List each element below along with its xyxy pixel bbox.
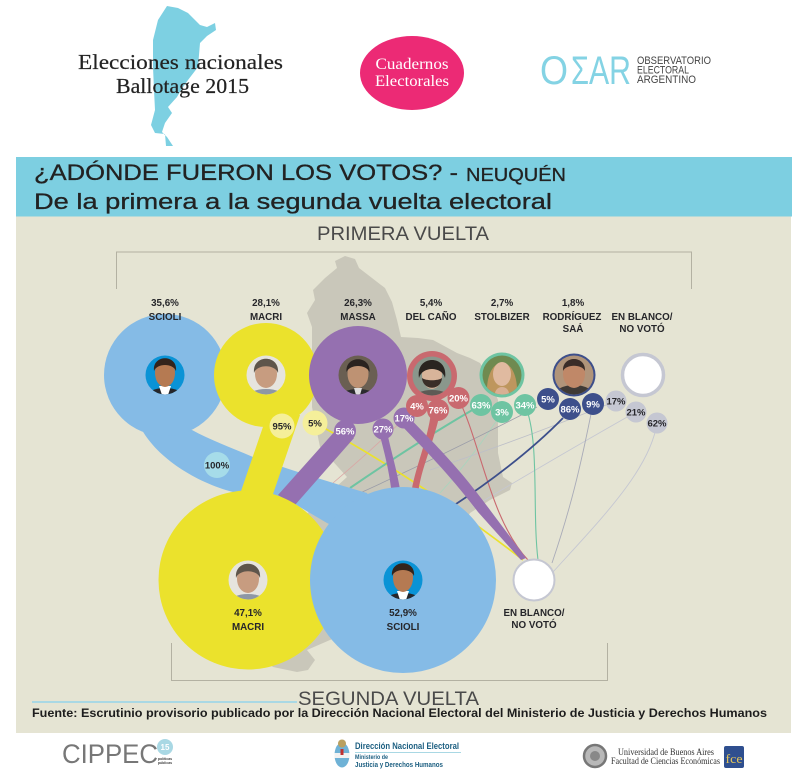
ring: blank first round bbox=[622, 354, 664, 396]
heading: primera vuelta: PRIMERA VUELTA bbox=[317, 224, 489, 245]
bracket: segunda vuelta bbox=[172, 643, 608, 680]
flow: Massa to Macri 56% bbox=[278, 430, 354, 505]
photo: Macri bbox=[246, 356, 286, 394]
circle: blank second round bbox=[514, 560, 554, 600]
labels: second-round candidates: SCIOLI bbox=[387, 622, 420, 633]
heading: Elecciones nacionales: Elecciones nacionales bbox=[78, 50, 283, 74]
photo: Massa bbox=[338, 356, 378, 394]
labels: first-round candidates: 28,1% bbox=[252, 298, 280, 309]
bubble group: percentages bbox=[204, 387, 668, 478]
source note: Fuente: Escrutinio provisorio publicado por la Dirección Nacional Electoral del Ministerio de Justicia y Derechos Humanos bbox=[32, 708, 767, 720]
badge: Cuadernos Electorales: Electorales bbox=[375, 73, 449, 90]
logo: OEAR bbox=[540, 49, 711, 93]
icon: map of Argentina bbox=[151, 6, 216, 146]
labels: first-round candidates: 5,4% bbox=[420, 298, 442, 309]
bubble group: percentages: 9% bbox=[586, 400, 600, 410]
ring: Rodríguez Saá first round bbox=[552, 354, 596, 396]
labels: first-round candidates: 1,8% bbox=[562, 298, 584, 309]
labels: second-round candidates: MACRI bbox=[232, 622, 264, 633]
labels: first-round candidates bbox=[149, 298, 673, 335]
labels: second-round candidates: 52,9% bbox=[389, 608, 417, 619]
bubble group: percentages: 56% bbox=[335, 426, 355, 438]
bubble group: percentages: 17% bbox=[606, 396, 626, 408]
logo: OEAR: OBSERVATORIO bbox=[637, 55, 711, 67]
logo: Universidad de Buenos Aires: Facultad de Ciencias Económicas bbox=[611, 757, 720, 767]
labels: first-round candidates: NO VOTÓ bbox=[619, 323, 665, 335]
labels: first-round candidates: STOLBIZER bbox=[474, 312, 530, 323]
logo: CIPPEC: 15 bbox=[161, 743, 170, 752]
bubble group: percentages: 27% bbox=[373, 424, 393, 436]
bubble group: percentages: 21% bbox=[626, 408, 646, 418]
circle: Macri second round bbox=[158, 490, 338, 670]
labels: first-round candidates: 35,6% bbox=[151, 298, 179, 309]
labels: first-round candidates: 2,7% bbox=[491, 298, 513, 309]
badge: Cuadernos Electorales: Cuadernos bbox=[376, 56, 448, 73]
bubble group: percentages: 4% bbox=[410, 402, 424, 412]
heading: Elecciones nacionales: Ballotage 2015 bbox=[116, 74, 249, 98]
logo: OEAR: AR bbox=[589, 49, 631, 93]
ring: Del Caño first round bbox=[407, 351, 457, 401]
labels: first-round candidates: MACRI bbox=[250, 312, 282, 323]
bubble group: percentages: 86% bbox=[560, 404, 580, 416]
logo: Universidad de Buenos Aires bbox=[584, 745, 744, 768]
flow: Macri to Macri 95% bbox=[239, 415, 300, 497]
labels: first-round candidates: RODRÍGUEZ bbox=[543, 311, 601, 323]
logo: CIPPEC: CIPPEC bbox=[62, 739, 158, 769]
badge: Cuadernos Electorales bbox=[360, 36, 464, 110]
labels: first-round candidates: EN BLANCO/ bbox=[612, 312, 673, 323]
photo: Rodríguez Saá bbox=[554, 356, 594, 394]
labels: second-round candidates: 47,1% bbox=[234, 608, 262, 619]
labels: first-round candidates: MASSA bbox=[340, 312, 376, 323]
bubble group: percentages: 5% bbox=[308, 418, 322, 430]
bubble group: percentages: 63% bbox=[471, 400, 491, 412]
bubble group: percentages: 100% bbox=[205, 460, 230, 472]
labels: first-round candidates: SCIOLI bbox=[149, 312, 182, 323]
bubble group: percentages: 95% bbox=[272, 422, 292, 432]
labels: first-round candidates: SAÁ bbox=[563, 323, 583, 335]
photo: Scioli bbox=[146, 356, 184, 394]
bracket: primera vuelta bbox=[116, 252, 692, 289]
flow: Scioli to Scioli 100% bbox=[142, 430, 403, 560]
bubble group: percentages: 20% bbox=[449, 394, 469, 404]
bubble group: percentages: 62% bbox=[647, 418, 667, 430]
heading: main title: De la primera a la segunda vuelta electoral bbox=[34, 189, 552, 214]
flow: Massa to Scioli 27% bbox=[379, 432, 401, 495]
flow: Del Caño to Macri/Scioli 76% bbox=[411, 412, 440, 495]
ring: Massa first round bbox=[309, 326, 407, 424]
ring: Scioli first round bbox=[104, 314, 226, 436]
logo: Universidad de Buenos Aires: fce bbox=[726, 751, 743, 766]
photo: Scioli second round bbox=[384, 560, 422, 600]
heading: main title bbox=[34, 160, 566, 214]
panel: title banner bbox=[16, 157, 792, 216]
bubble group: percentages: 5% bbox=[541, 394, 555, 406]
logo: Dirección Nacional Electoral: Dirección Nacional Electoral bbox=[355, 741, 459, 751]
logo: CIPPEC: públicas bbox=[158, 761, 172, 765]
circle: Scioli second round bbox=[310, 487, 496, 673]
logo: Dirección Nacional Electoral bbox=[334, 740, 461, 769]
heading: segunda vuelta: SEGUNDA VUELTA bbox=[298, 688, 479, 710]
logo: OEAR: Σ bbox=[571, 49, 589, 93]
ring: Stolbizer first round bbox=[480, 352, 524, 398]
photo: Stolbizer bbox=[482, 356, 522, 394]
bubble group: percentages: 34% bbox=[515, 400, 535, 412]
logo: Universidad de Buenos Aires: Universidad de Buenos Aires bbox=[618, 748, 714, 758]
labels: second-round candidates: NO VOTÓ bbox=[511, 619, 557, 631]
bubble group: percentages: 76% bbox=[428, 406, 448, 416]
logo: Dirección Nacional Electoral: Ministerio de bbox=[355, 754, 388, 761]
labels: second-round candidates: EN BLANCO/ bbox=[504, 608, 565, 619]
photo: Del Caño bbox=[412, 356, 452, 396]
heading: main title: NEUQUÉN bbox=[466, 165, 566, 185]
logo: OEAR: ELECTORAL bbox=[637, 64, 689, 76]
map: Neuquén province bbox=[240, 256, 512, 672]
heading: Elecciones nacionales bbox=[78, 50, 283, 98]
heading: main title: ¿ADÓNDE FUERON LOS VOTOS? - bbox=[34, 160, 458, 185]
bubble group: percentages: 3% bbox=[495, 408, 509, 418]
logo: OEAR: ARGENTINO bbox=[637, 74, 696, 86]
photo: Macri second round bbox=[228, 560, 268, 600]
bubble group: percentages: 17% bbox=[394, 414, 414, 424]
logo: CIPPEC: políticas bbox=[158, 757, 172, 761]
labels: first-round candidates: 26,3% bbox=[344, 298, 372, 309]
logo: Dirección Nacional Electoral: Justicia y Derechos Humanos bbox=[355, 760, 443, 769]
flow: Massa to blank 17% bbox=[400, 412, 526, 560]
labels: second-round candidates bbox=[232, 608, 565, 633]
labels: first-round candidates: DEL CAÑO bbox=[406, 312, 457, 323]
ring: Macri first round bbox=[214, 323, 318, 427]
flow: thin transfer lines bbox=[315, 398, 657, 572]
panel: beige background bbox=[16, 216, 791, 733]
logo: OEAR: O bbox=[540, 49, 568, 93]
